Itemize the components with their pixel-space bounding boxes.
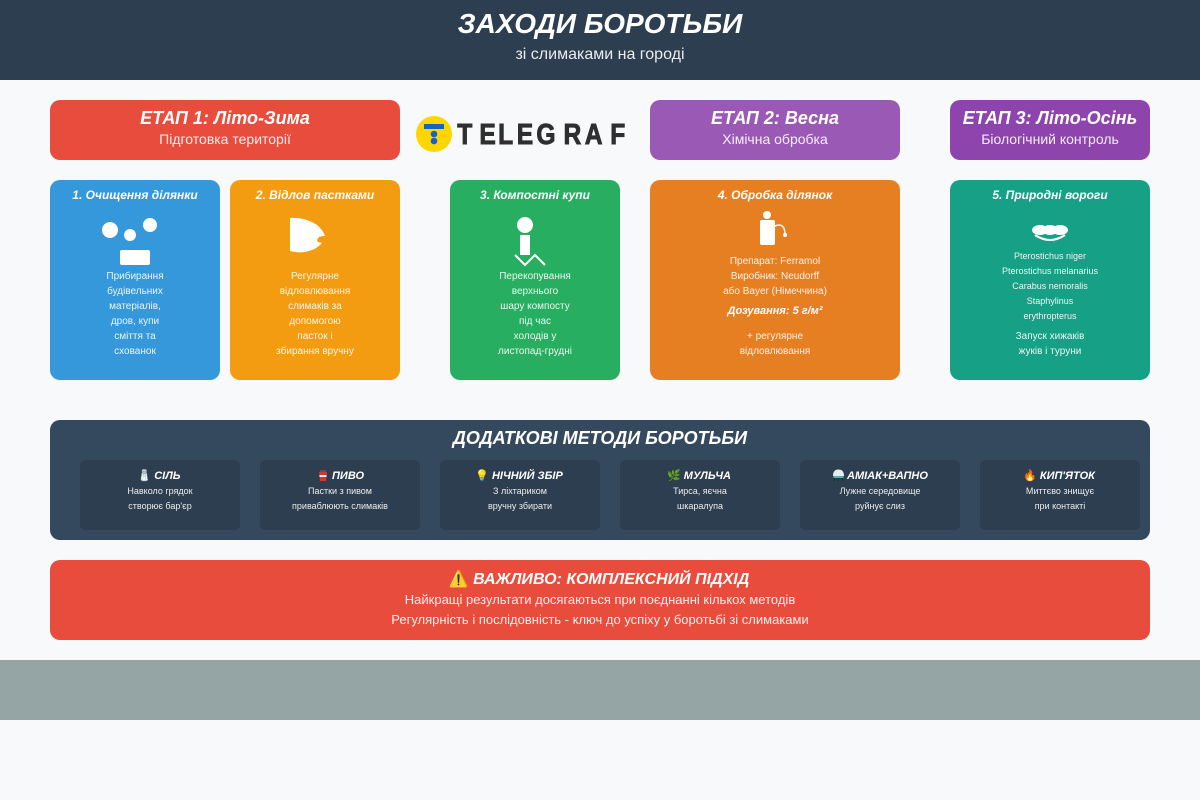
stage 2 header — [650, 100, 900, 160]
subtitle: зі слимаками на городі — [515, 46, 685, 63]
panel: 1 site clearing: 1. Очищення ділянки — [72, 188, 198, 202]
panel: 2 trapping — [230, 180, 400, 380]
icon: sprayer — [760, 211, 787, 245]
text: compost description: верхнього — [512, 286, 559, 297]
stage 2 header: Хімічна обробка — [722, 131, 828, 147]
text: trapping description: Регулярне — [291, 271, 339, 282]
method: night collection: 💡 НІЧНИЙ ЗБІР — [475, 469, 563, 482]
stage 1 header: ЕТАП 1: Літо-Зима — [140, 108, 310, 128]
method: beer: приваблюють слимаків — [292, 501, 388, 511]
callout: important: Регулярність і послідовність - ключ до успіху у боротьбі зі слимаками — [391, 612, 809, 627]
text: product details: Препарат: Ferramol — [730, 256, 820, 267]
stage 2 header: ЕТАП 2: Весна — [711, 108, 839, 128]
stage 3 header — [950, 100, 1150, 160]
method: ammonia and lime — [800, 460, 960, 530]
text: species list: Staphylinus — [1027, 296, 1074, 306]
method: salt: Навколо грядок — [127, 486, 193, 496]
method: beer: Пастки з пивом — [308, 486, 372, 496]
text: product details — [723, 256, 827, 297]
icon: beer cup — [319, 470, 327, 481]
text: trapping description — [276, 271, 354, 357]
text: species list: erythropterus — [1023, 311, 1077, 321]
text: trapping description: збирання вручну — [276, 345, 354, 357]
panel: 5 natural enemies — [950, 180, 1150, 380]
panel: 4 treatment — [650, 180, 900, 380]
text: clearing description: Прибирання — [106, 270, 164, 282]
method: boiling water — [980, 460, 1140, 530]
title: ЗАХОДИ БОРОТЬБИ — [458, 8, 743, 39]
method: boiling water: при контакті — [1035, 501, 1085, 511]
method: night collection: вручну збирати — [488, 501, 552, 511]
method: night collection: З ліхтариком — [493, 486, 547, 496]
text: extra note: + регулярне — [747, 331, 803, 342]
stage 3 header: ЕТАП 3: Літо-Осінь — [963, 108, 1137, 128]
method: boiling water: 🔥 КИП'ЯТОК — [1023, 469, 1096, 482]
text: trapping description: відловлювання — [280, 286, 350, 297]
icon: trap — [290, 218, 325, 252]
icon: beetles — [1032, 225, 1068, 240]
footer band — [0, 660, 1200, 720]
icon: debris — [102, 218, 157, 265]
stage 3 header: Біологічний контроль — [981, 131, 1119, 147]
icon: ammonia dome — [833, 470, 844, 481]
callout: important: ⚠️ ВАЖЛИВО: КОМПЛЕКСНИЙ ПІДХІД — [449, 568, 750, 588]
method: salt: 🧂 СІЛЬ — [137, 468, 181, 482]
text: compost description: холодів у — [514, 331, 556, 342]
callout: important: Найкращі результати досягаються при поєднанні кількох методів — [405, 592, 795, 607]
panel: 1 site clearing — [50, 180, 220, 380]
panel: 3 compost heaps: 3. Компостні купи — [480, 188, 591, 202]
panel: 3 compost heaps — [450, 180, 620, 380]
method: beer: ПИВО — [332, 470, 364, 482]
text: compost description: Перекопування — [499, 271, 571, 282]
text: clearing description: матеріалів, — [109, 301, 161, 312]
method: ammonia and lime: АМІАК+ВАПНО — [846, 470, 928, 482]
panel: additional methods — [50, 420, 1150, 540]
method: boiling water: Миттєво знищує — [1026, 486, 1095, 496]
text: trapping description: пасток і — [297, 331, 333, 342]
text: clearing description: дров, купи — [111, 316, 159, 327]
text: clearing description: схованок — [114, 346, 156, 357]
logo: Telegraf: TELEGRAF — [457, 118, 625, 150]
panel: 2 trapping: 2. Відлов пастками — [255, 188, 375, 202]
method: mulch: шкаралупа — [677, 501, 723, 511]
text: dosage: Дозування: 5 г/м² — [727, 305, 823, 317]
text: extra note — [740, 331, 810, 357]
text: extra note: відловлювання — [740, 346, 810, 357]
text: product details: або Bayer (Німеччина) — [723, 285, 827, 297]
callout: important — [50, 560, 1150, 640]
header band — [0, 0, 1200, 80]
text: compost description — [498, 271, 572, 357]
text: compost description: листопад-грудні — [498, 346, 572, 357]
text: species list: Pterostichus melanarius — [1002, 266, 1099, 276]
icon: person digging — [515, 217, 545, 265]
text: trapping description: слимаків за — [288, 301, 342, 312]
method: salt — [80, 460, 240, 530]
method: night collection — [440, 460, 600, 530]
method: mulch: Тирса, яєчна — [673, 486, 727, 496]
method: ammonia and lime: руйнує слиз — [855, 501, 905, 511]
text: clearing description: сміття та — [114, 331, 156, 342]
stage 1 header: Підготовка території — [159, 131, 291, 147]
method: ammonia and lime: Лужне середовище — [840, 486, 920, 496]
text: clearing description: будівельних — [107, 285, 163, 297]
method: mulch — [620, 460, 780, 530]
text: release note — [1016, 331, 1084, 357]
text: clearing description — [106, 270, 164, 357]
text: compost description: шару компосту — [500, 301, 570, 312]
method: beer — [260, 460, 420, 530]
panel: 5 natural enemies: 5. Природні вороги — [992, 188, 1108, 202]
text: trapping description: допомогою — [289, 316, 341, 327]
text: product details: Виробник: Neudorff — [731, 270, 819, 282]
text: species list: Pterostichus niger — [1014, 251, 1086, 261]
stage 1 header — [50, 100, 400, 160]
heading: additional methods: ДОДАТКОВІ МЕТОДИ БОРОТЬБИ — [451, 428, 748, 448]
method: mulch: 🌿 МУЛЬЧА — [667, 469, 731, 482]
text: species list — [1002, 251, 1099, 321]
method: salt: створює бар'єр — [128, 501, 192, 511]
text: species list: Carabus nemoralis — [1012, 281, 1088, 291]
text: release note: жуків і туруни — [1019, 346, 1081, 357]
panel: 4 treatment: 4. Обробка ділянок — [717, 188, 833, 202]
text: compost description: під час — [519, 316, 551, 327]
text: release note: Запуск хижаків — [1016, 331, 1084, 342]
